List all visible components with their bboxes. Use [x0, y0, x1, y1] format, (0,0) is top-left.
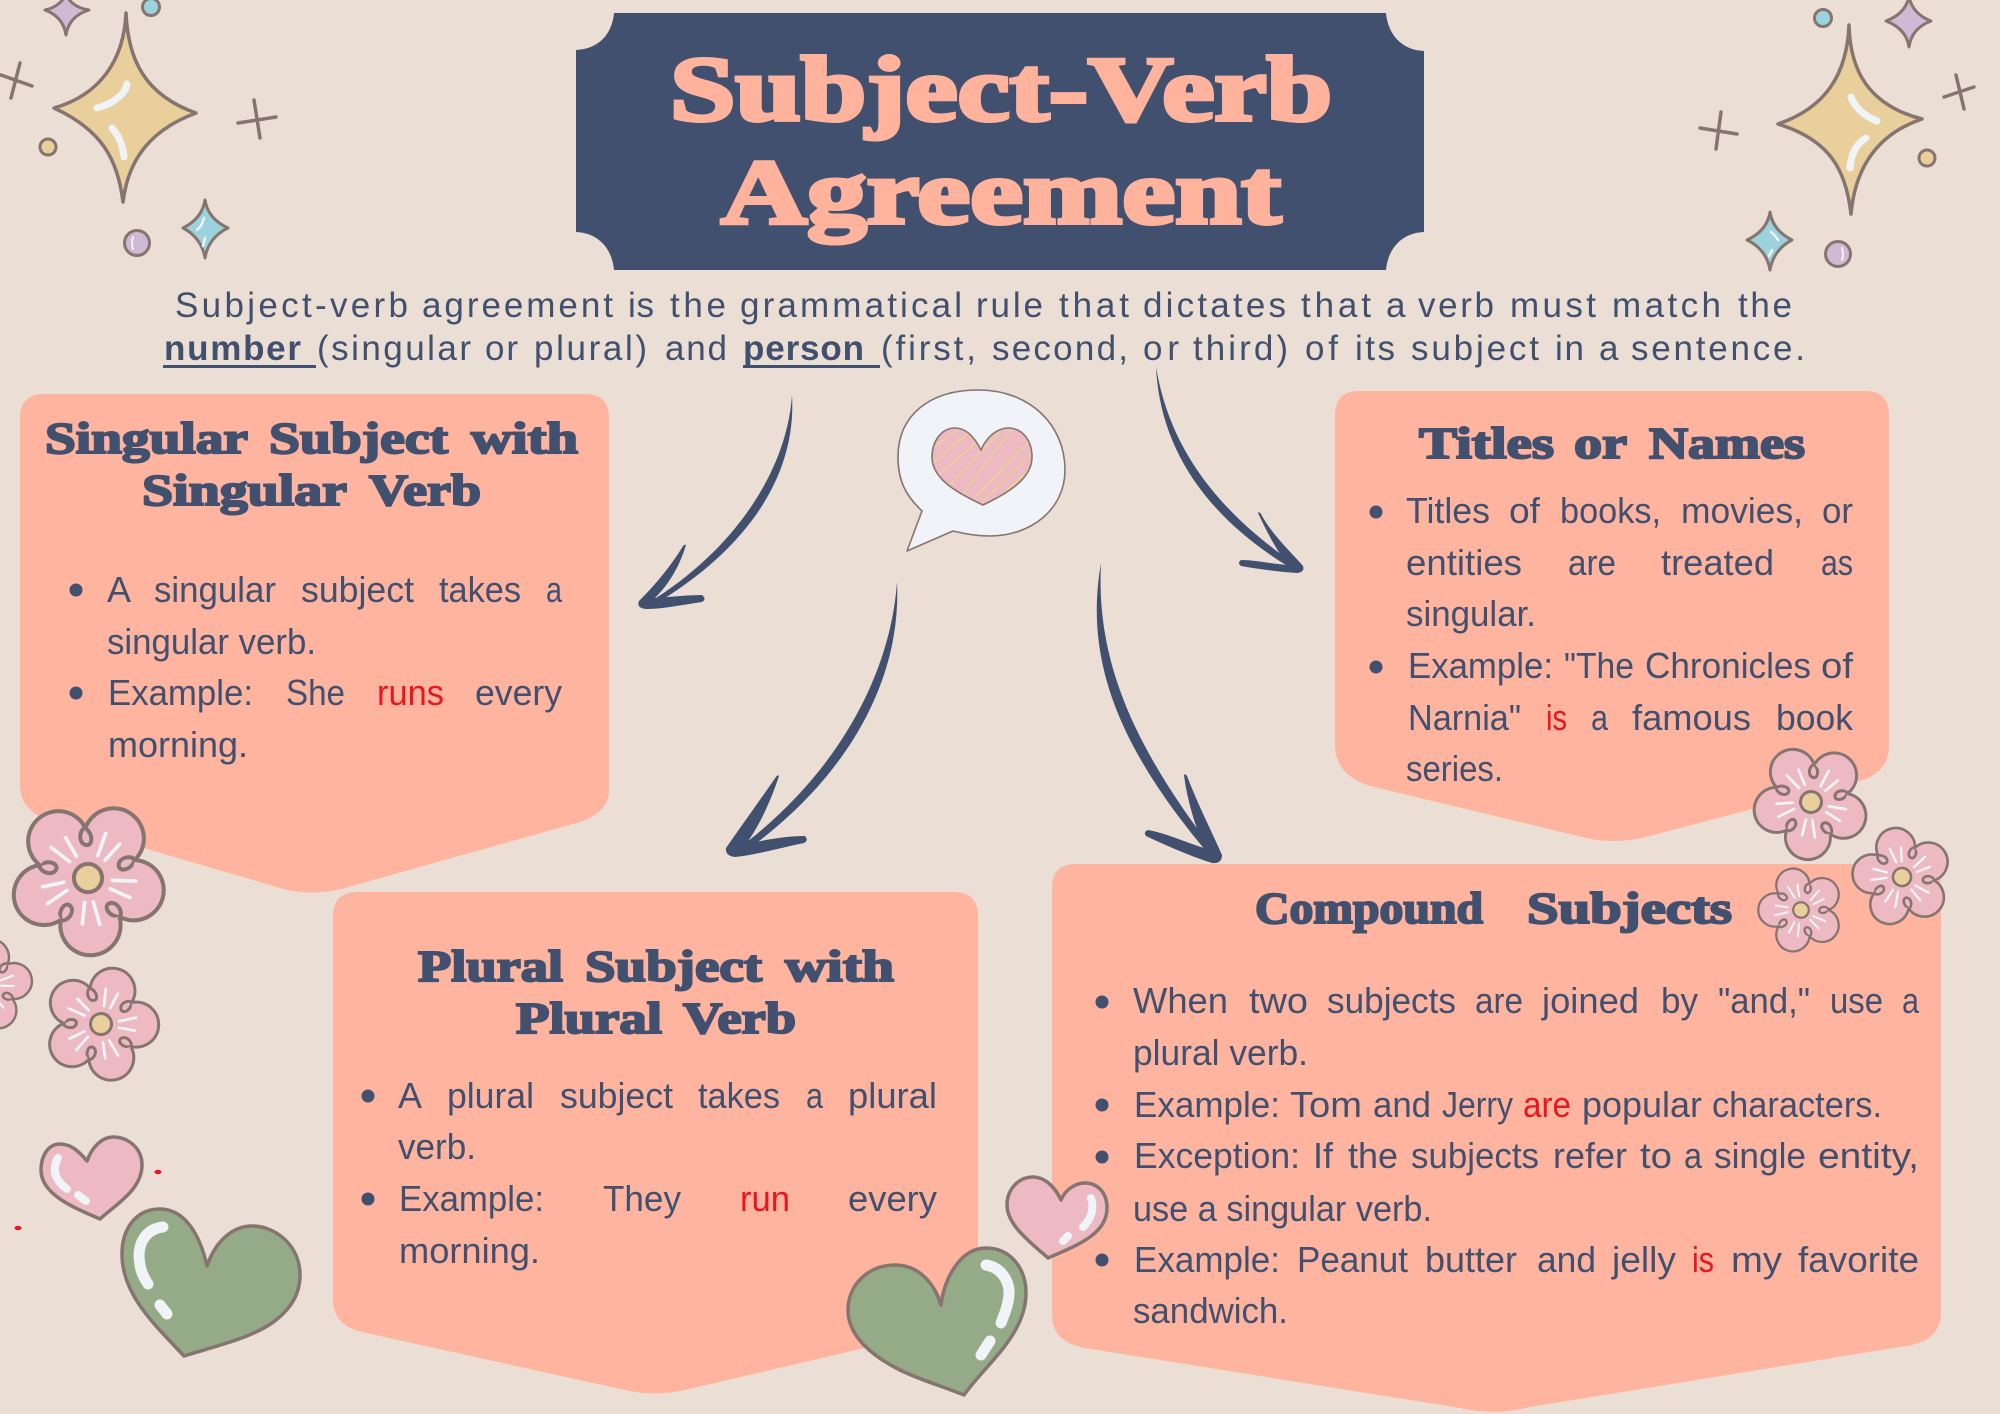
intro text: grammatical — [740, 286, 962, 325]
title text: Agreement — [721, 141, 1281, 243]
bullet list: titles: entities — [1406, 542, 1522, 583]
bullet list: compound: Example: — [1134, 1084, 1280, 1125]
bullet list: compound: and — [1373, 1084, 1431, 1125]
bullet list: singular: every — [475, 672, 562, 713]
bullet list: compound: are — [1523, 1084, 1571, 1125]
arrow: to singular panel — [638, 395, 792, 609]
bullet list: titles: series. — [1406, 748, 1503, 789]
bullet list: titles: Narnia" — [1408, 697, 1521, 738]
bullet list: compound: the — [1348, 1135, 1398, 1176]
intro text: dictates — [1143, 286, 1286, 325]
title text: Subject-Verb — [670, 38, 1332, 140]
intro text: match — [1612, 286, 1721, 325]
sparkles: top right — [1700, 0, 1974, 270]
bullet list: compound: use — [1830, 980, 1883, 1021]
intro text: of — [1305, 329, 1338, 368]
bullet list: compound: sandwich. — [1133, 1290, 1288, 1331]
bullet list: compound: Tom — [1290, 1084, 1362, 1125]
heading: plural — [418, 942, 894, 1043]
bullet list: titles: "The — [1564, 645, 1634, 686]
bullet list: compound: Peanut — [1297, 1239, 1408, 1280]
heading: titles: Titles — [1419, 419, 1554, 468]
bullet list: compound: two — [1249, 980, 1308, 1021]
intro text: (singular — [317, 329, 471, 368]
intro text: a — [1386, 286, 1406, 325]
bullet list: titles: or — [1822, 490, 1853, 531]
bullet list: plural: verb. — [398, 1126, 476, 1167]
bullet list: plural — [362, 1075, 937, 1271]
heading: singular: Verb — [369, 466, 481, 515]
heading: plural: Plural — [516, 994, 662, 1043]
bullet list: plural: They — [603, 1178, 681, 1219]
bullet list: titles: Chronicles — [1645, 645, 1811, 686]
bullet list: titles: a — [1591, 697, 1609, 738]
bullet list: compound: single — [1714, 1135, 1806, 1176]
bullet list: compound: use a singular verb. — [1133, 1188, 1432, 1229]
bullet list: compound: butter — [1425, 1239, 1517, 1280]
heading: plural: Plural — [418, 942, 563, 991]
heading: plural: with — [785, 942, 894, 991]
title text — [670, 38, 1332, 243]
bullet list: compound: a — [1684, 1135, 1703, 1176]
bullet list: titles: is — [1546, 697, 1567, 738]
arrow: to titles panel — [1156, 367, 1303, 573]
heading: plural: Subject — [585, 942, 762, 991]
bullet list: compound: are — [1475, 980, 1523, 1021]
bullet list: compound: jelly — [1611, 1239, 1676, 1280]
bullet list: singular: A — [107, 569, 131, 610]
bullet list: compound: When — [1133, 980, 1228, 1021]
bullet list: plural: morning. — [399, 1230, 540, 1271]
title plaque — [576, 13, 1424, 270]
sparkles: top left — [1, 0, 276, 258]
bullet list: compound: and — [1537, 1239, 1596, 1280]
intro text: or — [485, 329, 518, 368]
intro text: agreement — [422, 286, 613, 325]
heading: singular: with — [471, 414, 578, 463]
panel: titles or names — [1335, 391, 1889, 841]
bullet list: singular: morning. — [108, 724, 248, 765]
intro text: a — [1599, 329, 1619, 368]
panel: compound subjects — [1052, 864, 1941, 1412]
bullet list: titles: famous — [1632, 697, 1751, 738]
bullet list: singular: singular — [154, 569, 276, 610]
intro text: or — [1143, 329, 1179, 368]
intro text: sentence. — [1631, 329, 1805, 368]
bullet list: compound: characters. — [1712, 1084, 1882, 1125]
bullet list: singular: Example: — [108, 672, 253, 713]
arrow: to compound panel — [1097, 563, 1222, 863]
heart: green left — [122, 1209, 300, 1356]
intro text: is — [628, 286, 654, 325]
bullet list: compound: Jerry — [1442, 1084, 1513, 1125]
bullet list: compound: popular — [1582, 1084, 1702, 1125]
arrow: to plural panel — [726, 582, 897, 857]
heading: compound: Compound — [1255, 884, 1483, 933]
intro text: second, — [992, 329, 1128, 368]
bullet list: singular: runs — [377, 672, 444, 713]
bullet list: plural: plural — [848, 1075, 937, 1116]
intro text: must — [1510, 286, 1596, 325]
intro text: third) — [1193, 329, 1288, 368]
bullet list: compound — [1096, 980, 1920, 1331]
bullet list: compound: is — [1692, 1239, 1714, 1280]
heading: singular: Singular — [142, 466, 346, 515]
heading: titles: or — [1574, 419, 1626, 468]
intro text: Subject-verb — [175, 286, 408, 325]
heading: compound: Subjects — [1527, 884, 1732, 933]
bullet list: titles: movies, — [1681, 490, 1803, 531]
bullet list: compound: subjects — [1411, 1135, 1539, 1176]
bullet list: plural: Example: — [399, 1178, 544, 1219]
bullet list: titles: book — [1776, 697, 1854, 738]
intro text: subject — [1411, 329, 1539, 368]
heart: green right — [848, 1248, 1026, 1395]
bullet list: titles: of — [1509, 490, 1541, 531]
bullet list: plural: run — [740, 1178, 790, 1219]
bullet list: titles: Titles — [1406, 490, 1490, 531]
intro text: that — [1301, 286, 1371, 325]
intro text: plural) — [534, 329, 647, 368]
flower: small left — [23, 949, 178, 1101]
bullet list: compound: favorite — [1798, 1239, 1919, 1280]
bullet list: compound: joined — [1541, 980, 1639, 1021]
intro text: and — [665, 329, 727, 368]
heart: pink left — [41, 1137, 142, 1219]
heading: plural: Verb — [683, 994, 796, 1043]
flower: small right — [1744, 855, 1858, 966]
bullet list: compound: "and," — [1718, 980, 1810, 1021]
intro text — [163, 286, 1805, 368]
bullet list: plural: A — [398, 1075, 422, 1116]
heading: titles: Names — [1649, 419, 1805, 468]
bullet list: singular: a — [546, 569, 563, 610]
bullet list: plural: subject — [560, 1075, 673, 1116]
panel: plural subject — [333, 892, 978, 1394]
bullet list: singular: takes — [439, 569, 521, 610]
panel: singular subject — [20, 394, 609, 892]
intro text: rule — [976, 286, 1043, 325]
intro text: the — [1738, 286, 1792, 325]
intro text: person — [743, 329, 864, 368]
flower: right — [1840, 817, 1965, 938]
bullet list: plural: every — [848, 1178, 937, 1219]
flower: partial at left edge — [0, 931, 43, 1041]
bullet list: compound: If — [1313, 1135, 1334, 1176]
bullet list: plural: a — [806, 1075, 824, 1116]
intro text: verb — [1418, 286, 1494, 325]
bullet list: titles: are — [1568, 542, 1616, 583]
bullet list: compound: a — [1902, 980, 1920, 1021]
intro text: that — [1059, 286, 1129, 325]
red specks — [14, 1170, 162, 1230]
bullet list: plural: plural — [447, 1075, 534, 1116]
bullet list: compound: my — [1731, 1239, 1782, 1280]
flower: top right group — [1728, 721, 1895, 885]
bullet list: singular: singular verb. — [107, 621, 316, 662]
bullet list: titles — [1370, 490, 1854, 789]
intro text: (first, — [881, 329, 976, 368]
bullet list: titles: Example: — [1408, 645, 1553, 686]
bullet list: compound: entity, — [1818, 1135, 1919, 1176]
bullet list: singular: subject — [301, 569, 414, 610]
bullet list: titles: books, — [1560, 490, 1661, 531]
intro text: in — [1555, 329, 1584, 368]
bullet list: compound: to — [1640, 1135, 1672, 1176]
bullet list: compound: by — [1661, 980, 1698, 1021]
bullet list: titles: treated — [1661, 542, 1774, 583]
bullet list: plural: takes — [698, 1075, 780, 1116]
bullet list: compound: subjects — [1327, 980, 1456, 1021]
speech bubble with heart — [898, 390, 1065, 551]
bullet list: titles: singular. — [1406, 593, 1536, 634]
bullet list: singular: She — [286, 672, 345, 713]
bullet list: compound: Example: — [1134, 1239, 1280, 1280]
heading: singular: Subject — [269, 414, 448, 463]
heading: singular — [45, 414, 578, 515]
intro text: number — [164, 329, 301, 368]
bullet list: compound: Exception: — [1134, 1135, 1300, 1176]
bullet list: singular — [70, 569, 563, 765]
intro text: the — [670, 286, 726, 325]
intro text: its — [1355, 329, 1395, 368]
heart: pink right — [1007, 1177, 1107, 1258]
bullet list: compound: plural verb. — [1133, 1032, 1308, 1073]
bullet list: titles: as — [1821, 542, 1853, 583]
heading: singular: Singular — [45, 414, 247, 463]
bullet list: titles: of — [1821, 645, 1854, 686]
bullet list: compound: refer — [1553, 1135, 1627, 1176]
flower: large left — [0, 768, 200, 990]
